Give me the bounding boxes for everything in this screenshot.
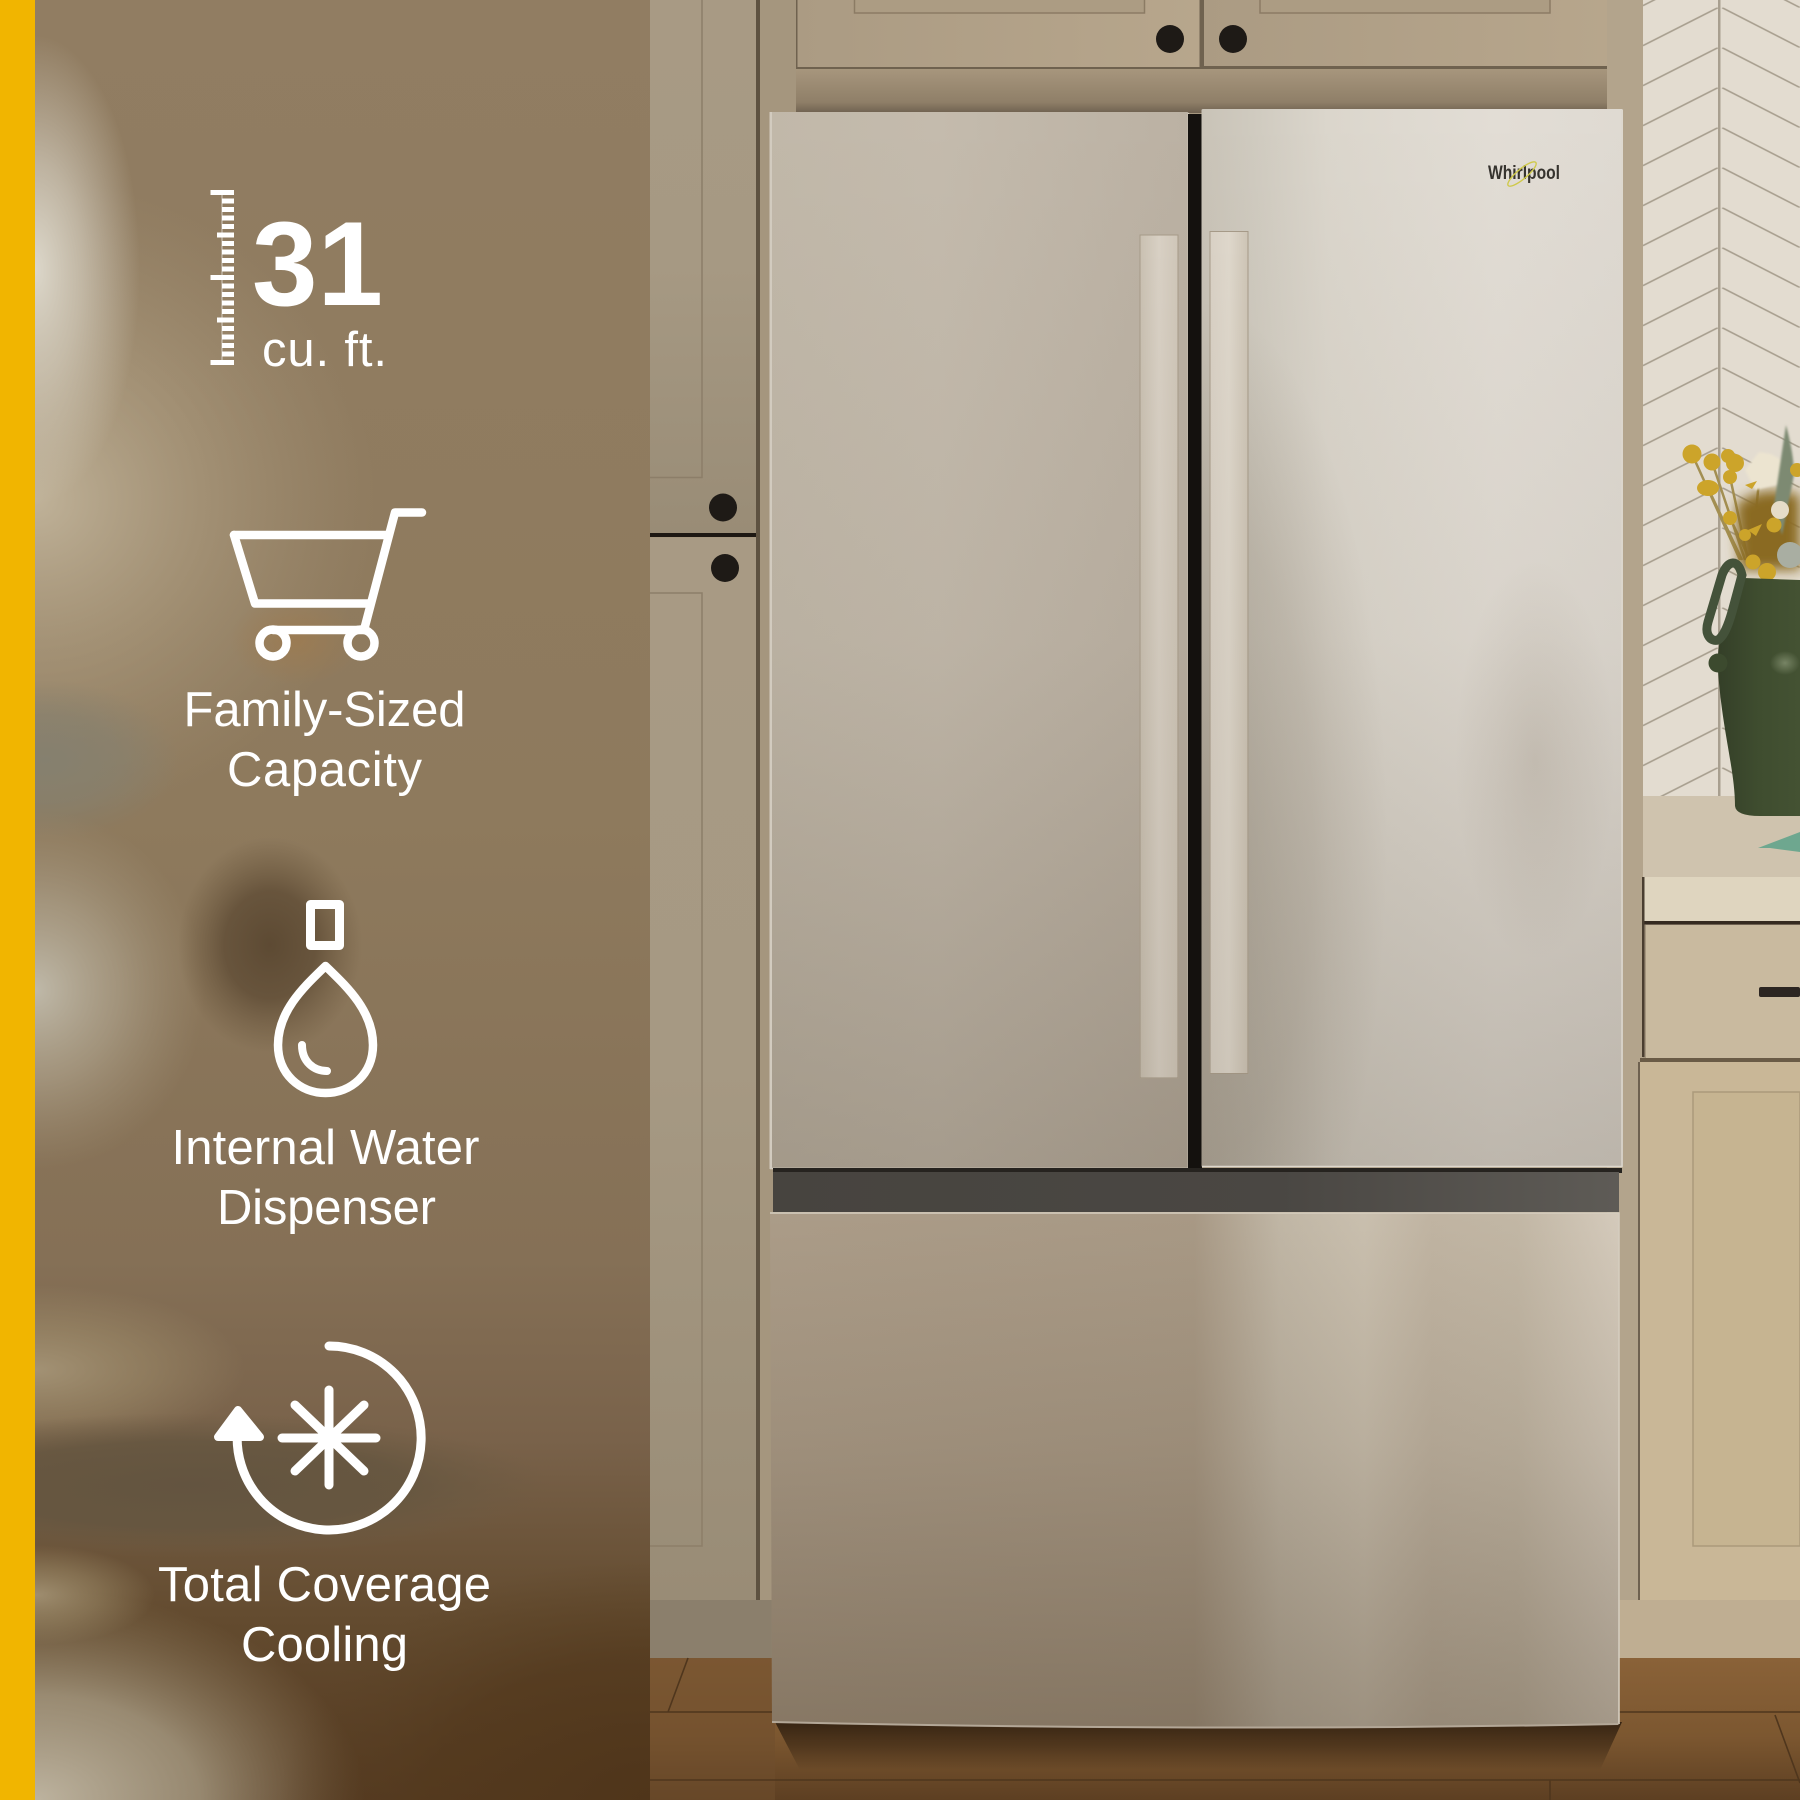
left tall cabinet — [650, 0, 796, 1600]
label: Family-Sized Capacity: Family-Sized — [184, 683, 466, 737]
photo: kitchen background — [650, 0, 1800, 1800]
vase with flowers — [1682, 425, 1800, 816]
feature: total coverage cooling — [158, 1346, 491, 1672]
freezer drawer — [770, 1212, 1619, 1728]
baseboards and floor — [650, 1600, 1800, 1800]
Whirlpool logo — [1488, 159, 1560, 189]
panel: blurred feature sidebar — [0, 0, 650, 1800]
label: Family-Sized Capacity — [184, 683, 466, 797]
label: Total Coverage Cooling: Total Coverage — [158, 1558, 491, 1612]
right door handle — [1210, 232, 1248, 1074]
label: Family-Sized Capacity: Capacity — [227, 743, 422, 797]
label: Internal Water Dispenser — [172, 1121, 480, 1235]
Whirlpool logo: Whirlpool — [1488, 163, 1560, 184]
left door handle — [1140, 235, 1178, 1078]
upper cabinet doors — [796, 0, 1610, 113]
right frame and chevron tile wall — [1607, 0, 1800, 1600]
right drawer and lower cabinet — [1638, 925, 1800, 1600]
label: Total Coverage Cooling — [158, 1558, 491, 1672]
refrigerator — [770, 109, 1623, 1728]
left door — [770, 112, 1188, 1169]
number: 31: 31 — [252, 197, 383, 331]
icon: left cabinet knobs — [709, 494, 739, 582]
label: Internal Water Dispenser: Internal Water — [172, 1121, 480, 1175]
feature: 31 cu. ft. capacity — [210, 190, 387, 377]
feature: internal water dispenser — [172, 904, 480, 1235]
icon: shopping cart — [234, 512, 422, 656]
icon: ruler — [210, 190, 234, 365]
countertop — [1642, 796, 1800, 1057]
unit: cu. ft.: cu. ft. — [262, 323, 387, 377]
dark band between doors and drawer — [773, 1168, 1622, 1212]
icon: circular arrow with snowflake — [218, 1346, 421, 1530]
right door — [1202, 109, 1623, 1167]
center door gap — [1188, 114, 1202, 1170]
icon: upper cabinet knobs — [1156, 25, 1247, 53]
yellow accent bar — [0, 0, 35, 1800]
label: Total Coverage Cooling: Cooling — [241, 1618, 408, 1672]
icon: water drop with spout — [278, 904, 373, 1093]
label: Internal Water Dispenser: Dispenser — [217, 1181, 436, 1235]
feature: family-sized capacity — [184, 512, 466, 797]
